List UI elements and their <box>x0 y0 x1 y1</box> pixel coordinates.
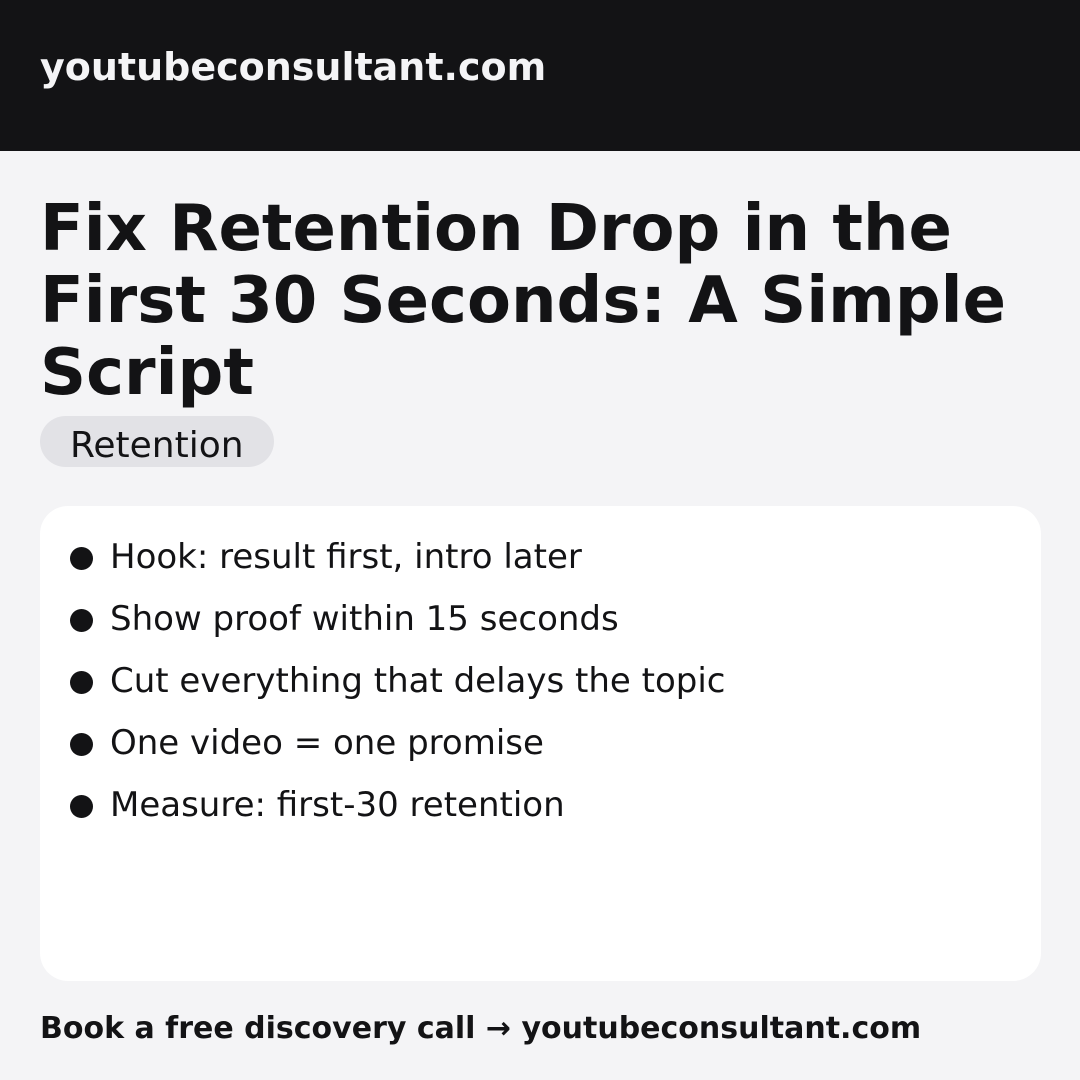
header bar <box>0 0 1080 151</box>
item 4: One video = one promise <box>110 723 544 763</box>
tag pill <box>40 416 274 467</box>
item 3: Cut everything that delays the topic <box>110 661 726 701</box>
tag pill: Retention <box>70 425 244 466</box>
footer call to action: Book a free discovery call → youtubeconsultant.com <box>40 1011 921 1046</box>
title: Fix Retention Drop in the First 30 Seconds: A Simple Script <box>40 192 1006 410</box>
item 1: Hook: result first, intro later <box>110 537 582 577</box>
item 2: Show proof within 15 seconds <box>110 599 619 639</box>
brand: youtubeconsultant.com <box>40 45 546 89</box>
panel: checklist <box>40 506 1041 981</box>
item 5: Measure: first-30 retention <box>110 785 565 825</box>
